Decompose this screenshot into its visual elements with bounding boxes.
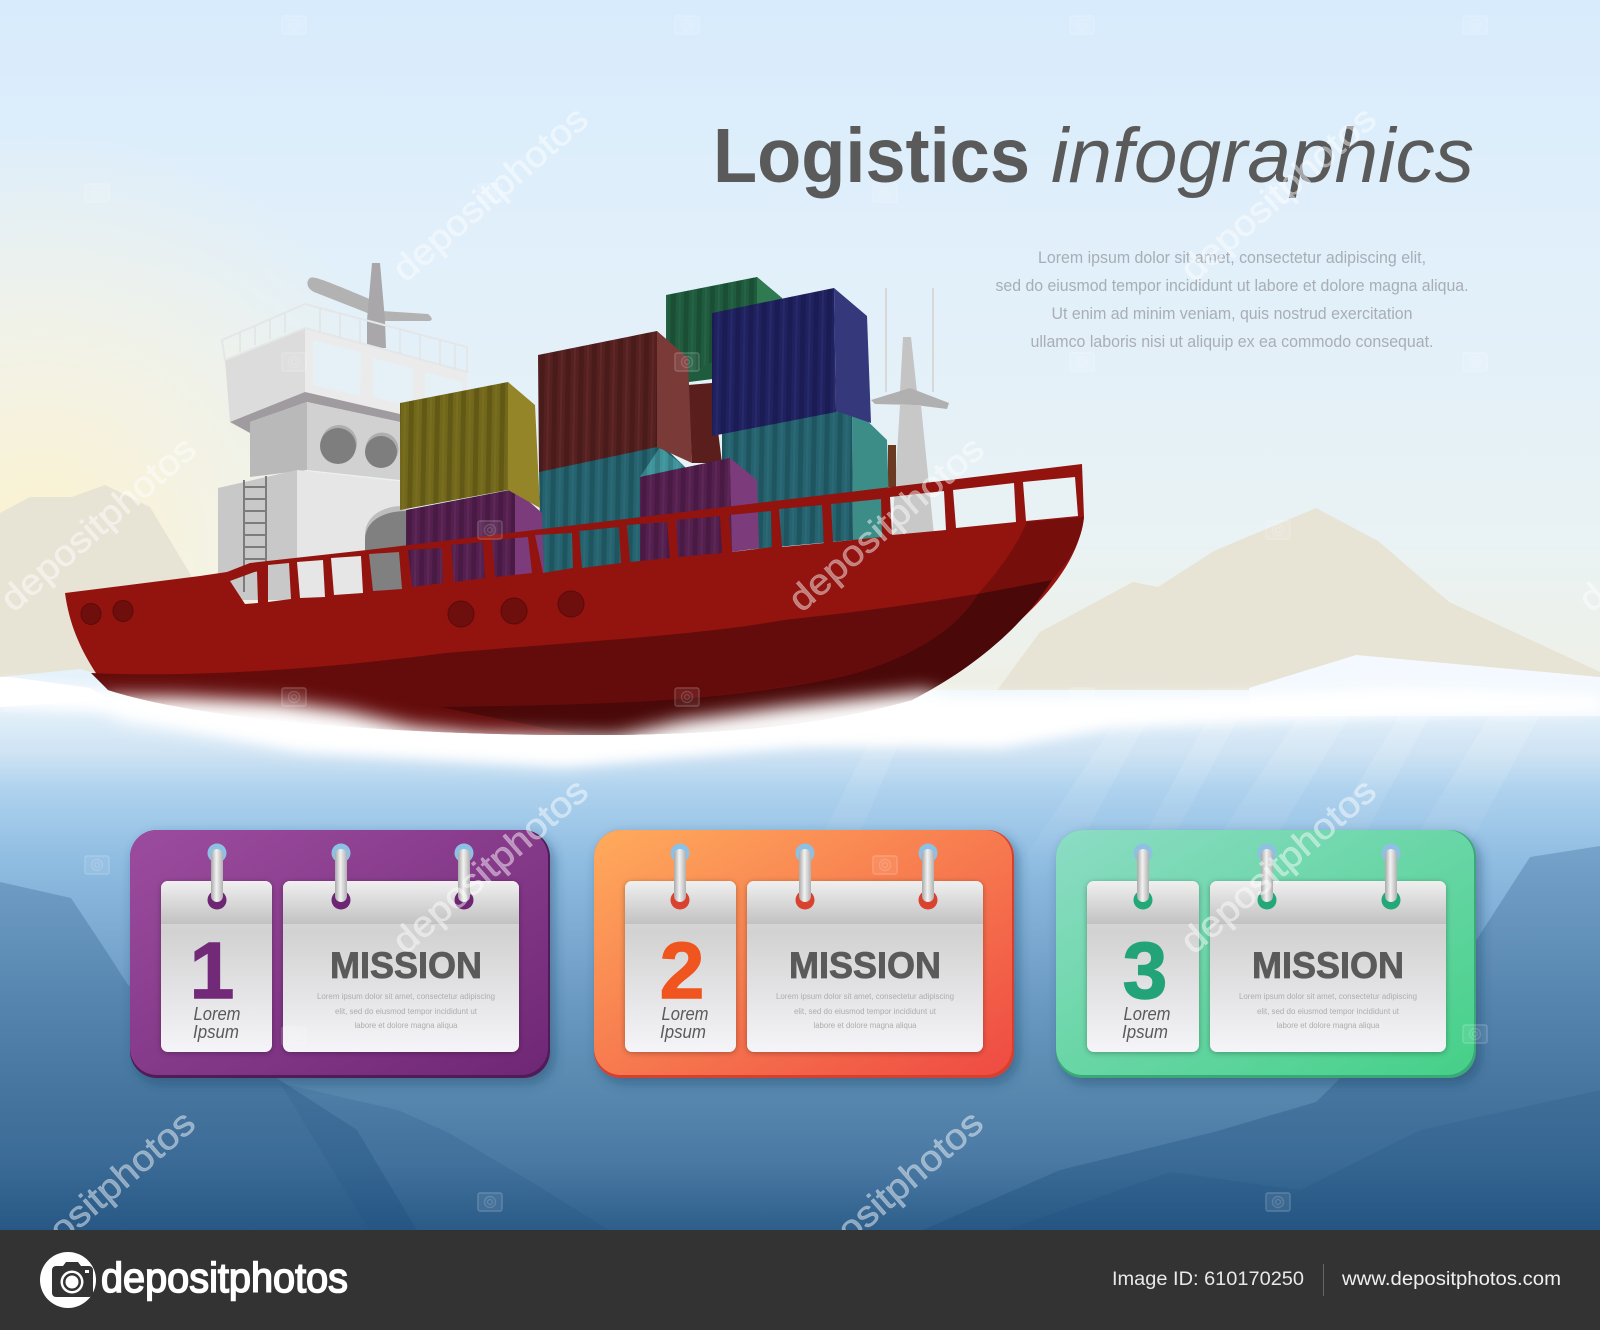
- binder rings: [670, 844, 938, 910]
- title: infographics: [1051, 113, 1474, 199]
- image id: Image ID: 610170250: [1112, 1269, 1304, 1290]
- intro paragraph: Ut enim ad minim veniam, quis nostrud exercitation: [1052, 304, 1412, 323]
- number page: Lorem: [1124, 1004, 1170, 1024]
- bridge structure: [218, 304, 467, 600]
- mission page: elit, sed do eiusmod tempor incididunt ut: [794, 1007, 937, 1016]
- container teal centre: [539, 443, 685, 580]
- mission page: labore et dolore magna aliqua: [354, 1021, 458, 1030]
- number page: [625, 881, 736, 1052]
- distant mountains: [0, 485, 1600, 700]
- bow mast tower: [871, 288, 949, 535]
- container purple lower: [406, 489, 544, 590]
- mission page: elit, sed do eiusmod tempor incididunt ut: [335, 1007, 478, 1016]
- intro paragraph: ullamco laboris nisi ut aliquip ex ea commodo consequat.: [1030, 332, 1434, 351]
- number page: Ipsum: [193, 1022, 239, 1042]
- mission page: labore et dolore magna aliqua: [1276, 1021, 1380, 1030]
- light rays: [800, 715, 1540, 880]
- number page: 2: [660, 926, 704, 1015]
- foam over hull: [100, 691, 950, 765]
- sky background: [0, 0, 1600, 720]
- number page: [161, 881, 272, 1052]
- mast on bridge: [307, 263, 432, 348]
- containers: [400, 277, 890, 590]
- website: www.depositphotos.com: [1341, 1269, 1561, 1290]
- mission page: [747, 881, 983, 1052]
- watermark overlay: depositphotos: [1172, 770, 1384, 961]
- mission page: MISSION: [330, 945, 482, 986]
- panel: mission 3 card: [1056, 830, 1476, 1078]
- footer bar: [0, 1230, 1600, 1330]
- depositphotos logo: [40, 1252, 348, 1308]
- container teal right: [722, 406, 890, 552]
- watermark overlay: depositphotos: [384, 770, 596, 961]
- foam surface: [0, 655, 1600, 762]
- mission page: Lorem ipsum dolor sit amet, consectetur adipiscing: [1239, 992, 1417, 1001]
- binder rings: [208, 844, 474, 910]
- container green: [666, 277, 782, 385]
- intro paragraph: sed do eiusmod tempor incididunt ut labore et dolore magna aliqua.: [996, 276, 1468, 295]
- mission page: labore et dolore magna aliqua: [814, 1021, 917, 1030]
- mission page: [1210, 881, 1446, 1052]
- watermark overlay: depositphotos: [779, 1102, 991, 1293]
- hull shading: [81, 517, 1084, 735]
- mission page: MISSION: [1252, 945, 1404, 986]
- title: Logistics: [713, 113, 1030, 199]
- container purple centre: [640, 458, 759, 565]
- watermark overlay: depositphotos: [384, 98, 596, 289]
- panel: mission 1 card: [130, 830, 550, 1078]
- container dark red rear: [688, 383, 722, 463]
- intro paragraph: [996, 248, 1468, 351]
- number page: 1: [190, 926, 234, 1015]
- number page: [1087, 881, 1199, 1052]
- number page: Lorem: [662, 1004, 708, 1024]
- portholes: [81, 591, 584, 627]
- number page: Lorem: [194, 1004, 240, 1024]
- title: [713, 113, 1474, 199]
- watermark overlay: depositphotos: [780, 428, 992, 619]
- container olive: [400, 382, 540, 510]
- ladder: [244, 476, 266, 592]
- red hull with rail openings: [65, 464, 1084, 735]
- number page: Ipsum: [660, 1022, 706, 1042]
- panel: mission 2 card: [594, 830, 1014, 1078]
- watermark overlay: depositphotos: [1172, 98, 1384, 289]
- underwater mountains: [0, 846, 1600, 1232]
- container navy: [712, 288, 871, 436]
- mission page: [283, 881, 519, 1052]
- container dark red: [538, 331, 692, 472]
- number page: Ipsum: [1122, 1022, 1168, 1042]
- sea: [0, 655, 1600, 1232]
- binder rings: [1134, 844, 1400, 910]
- mission page: elit, sed do eiusmod tempor incididunt ut: [1257, 1007, 1400, 1016]
- cargo ship: [65, 263, 1084, 765]
- number page: 3: [1123, 926, 1167, 1015]
- intro paragraph: Lorem ipsum dolor sit amet, consectetur adipiscing elit,: [1038, 248, 1426, 267]
- mission page: MISSION: [789, 945, 941, 986]
- mission page: Lorem ipsum dolor sit amet, consectetur adipiscing: [317, 992, 495, 1001]
- depositphotos logo: depositphotos: [101, 1254, 348, 1301]
- watermark camera icons: [85, 16, 1487, 1211]
- mission page: Lorem ipsum dolor sit amet, consectetur adipiscing: [776, 992, 954, 1001]
